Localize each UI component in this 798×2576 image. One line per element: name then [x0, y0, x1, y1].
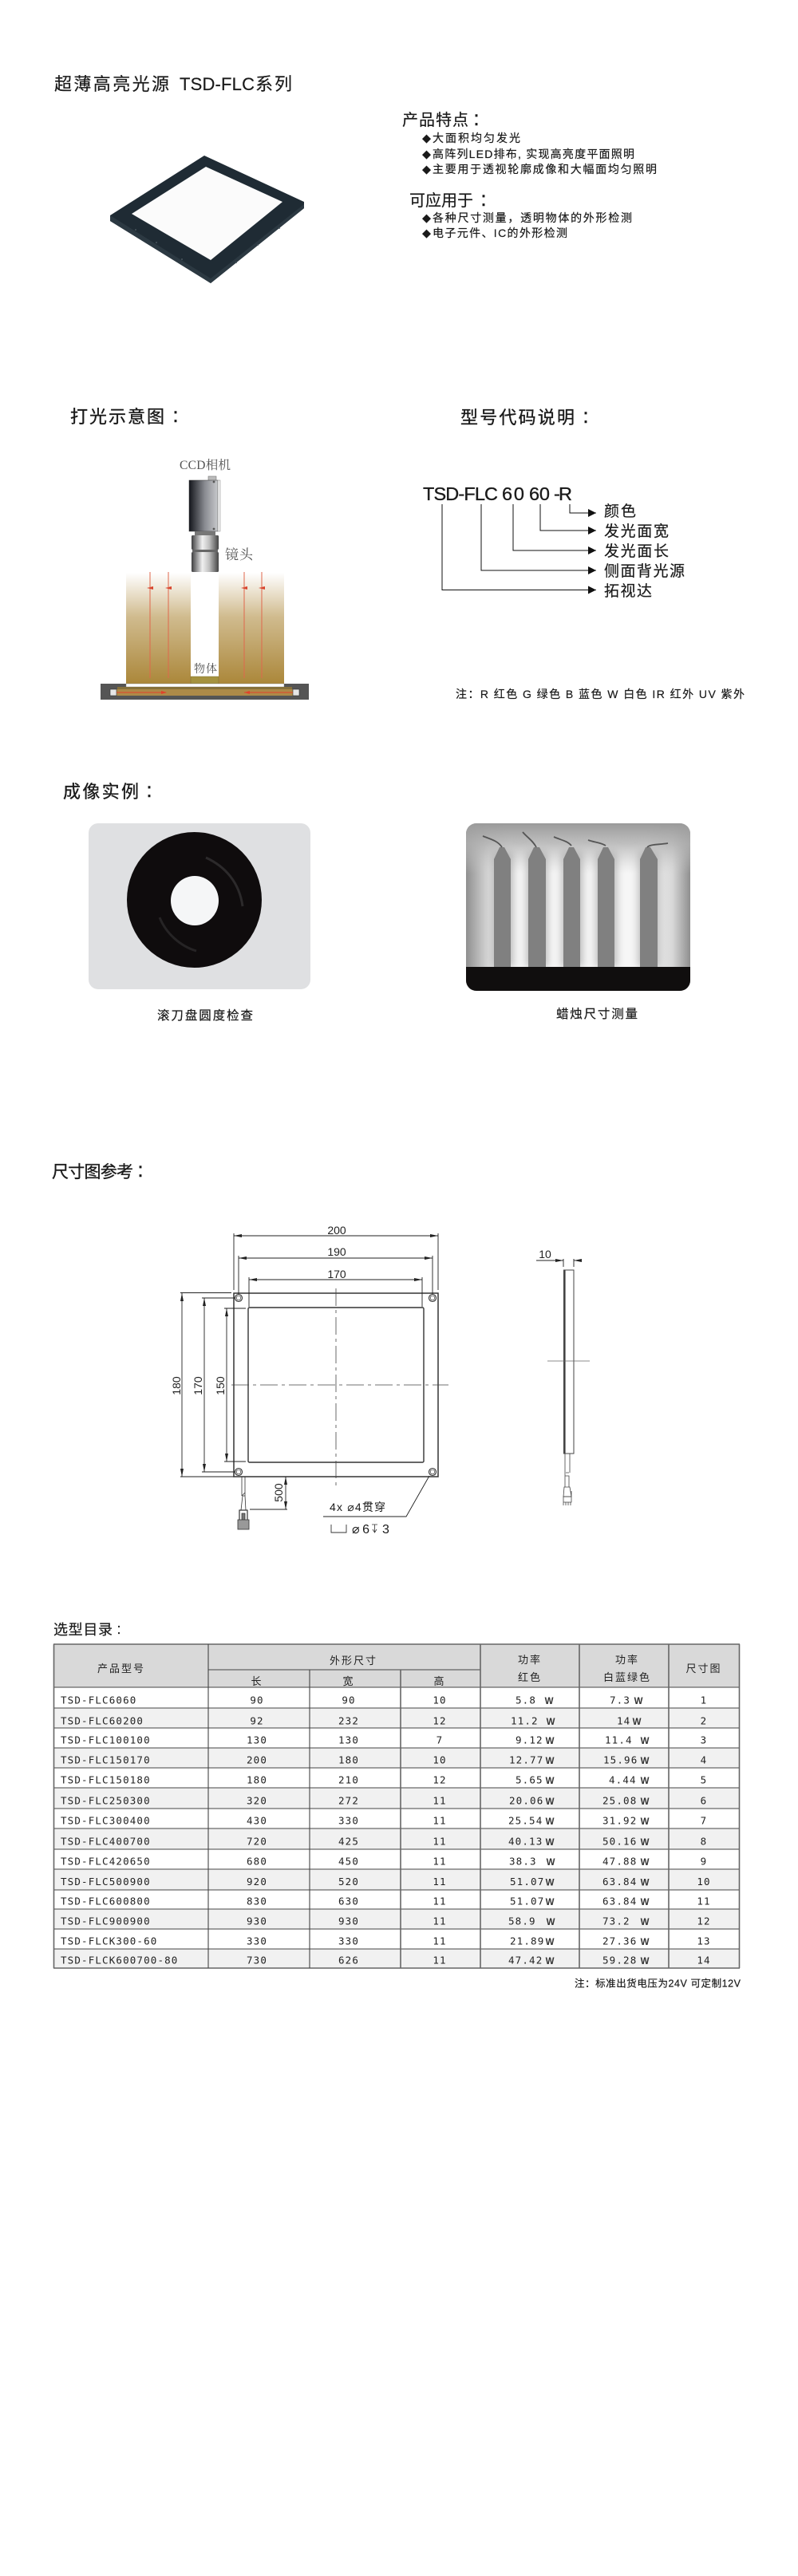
drawing number column: 3	[701, 1734, 707, 1746]
width column: 425	[338, 1835, 359, 1848]
white blue green power column: W	[641, 1918, 650, 1927]
red power column: 47.42	[508, 1955, 543, 1966]
cable and connector	[238, 1477, 249, 1529]
width dimension	[536, 1248, 580, 1267]
white blue green power column: W	[641, 1757, 650, 1766]
drawing number column: 14	[697, 1955, 711, 1966]
table header: 宽	[342, 1675, 355, 1687]
red power column: W	[546, 1777, 555, 1786]
white blue green power column: 73.2	[602, 1915, 630, 1927]
product photo: ultra-thin light panel	[110, 156, 304, 283]
model code text: 60	[529, 483, 550, 504]
applications	[409, 187, 632, 239]
hole callout: 3	[382, 1523, 389, 1537]
model code diagram	[423, 483, 685, 600]
white blue green power column: 4.44	[609, 1774, 637, 1785]
white blue green power column: 47.88	[602, 1856, 637, 1867]
table header: 产品型号	[97, 1663, 145, 1675]
white blue green power column: 63.84	[602, 1896, 637, 1907]
white blue green power column: W	[641, 1858, 650, 1868]
heading: dimension drawing: :	[137, 1158, 144, 1181]
model column: TSD-FLC150170	[61, 1753, 151, 1766]
red power column: 20.06	[509, 1795, 543, 1806]
key labels: 发光面长	[604, 542, 669, 560]
voltage note: 注：标准出货电压为24V 可定制12V	[575, 1977, 741, 1990]
colour code note: 注：R 红色 G 绿色 B 蓝色 W 白色 IR 红外 UV 紫外	[456, 688, 745, 700]
white blue green power column: 7.3	[610, 1694, 630, 1706]
caption: 滚刀盘圆度检查	[157, 1008, 253, 1023]
table header: 白蓝绿色	[603, 1671, 651, 1683]
width column: 180	[338, 1753, 359, 1766]
dimension values: 190	[327, 1245, 346, 1258]
side outline	[563, 1270, 574, 1454]
model column: TSD-FLCK300-60	[61, 1935, 157, 1947]
heading: lighting diagram: 打光示意图	[70, 407, 164, 427]
table header: 红色	[518, 1671, 542, 1683]
width column: 930	[338, 1915, 359, 1927]
length column: 930	[247, 1915, 267, 1927]
length column: 680	[247, 1856, 267, 1867]
feature list: ◆	[422, 165, 431, 176]
drawing number column: 1	[701, 1694, 707, 1706]
heading: lighting diagram: :	[172, 403, 179, 427]
model code text	[423, 483, 572, 504]
model column	[61, 1694, 179, 1966]
red power column: 51.07	[510, 1876, 544, 1888]
red power column: 11.2	[511, 1715, 539, 1726]
drawing number column: 4	[701, 1753, 707, 1766]
red power column: W	[547, 1858, 555, 1868]
white blue green power column: W	[641, 1797, 650, 1807]
model column: TSD-FLC300400	[61, 1814, 151, 1827]
key labels: 侧面背光源	[604, 562, 685, 580]
model column: TSD-FLCK600700-80	[61, 1955, 179, 1966]
heading: product features	[402, 106, 480, 130]
drawing number column: 11	[697, 1896, 711, 1907]
feature list: 主要用于透视轮廓成像和大幅面均匀照明	[433, 163, 657, 176]
application list: ◆	[422, 214, 431, 224]
heading: imaging examples: 成像实例	[63, 782, 139, 802]
drawing number column: 9	[701, 1856, 707, 1867]
application list: ◆	[422, 229, 431, 239]
red power column: 25.54	[508, 1814, 543, 1827]
white blue green power column: W	[641, 1957, 650, 1967]
length column: 130	[247, 1734, 267, 1746]
title	[54, 74, 292, 94]
drawing number column: 7	[701, 1814, 707, 1827]
white blue green power column: 11.4	[605, 1734, 633, 1746]
table grid	[53, 1644, 740, 1968]
object	[191, 677, 219, 684]
model code text: TSD-FLC	[423, 483, 498, 504]
white blue green power column: W	[641, 1737, 650, 1746]
red power column: W	[546, 1838, 555, 1848]
white blue green power column: W	[634, 1697, 643, 1706]
height column: 7	[437, 1734, 443, 1746]
width column: 210	[338, 1774, 359, 1785]
title: 系列	[255, 74, 292, 94]
height column: 11	[433, 1935, 447, 1947]
key labels: 颜色	[604, 503, 636, 520]
height column: 11	[433, 1915, 447, 1927]
table header: 外形尺寸	[330, 1655, 377, 1667]
object label: 物体	[194, 662, 217, 676]
model column: TSD-FLC420650	[61, 1856, 151, 1867]
heading: imaging examples: :	[146, 778, 152, 802]
white blue green power column: 25.08	[602, 1795, 637, 1806]
dimension values: 500	[272, 1483, 285, 1502]
hole callout: ⌀6	[352, 1523, 369, 1537]
drawing number column: 12	[697, 1915, 711, 1927]
height column: 12	[433, 1715, 447, 1726]
red power column: 21.89	[510, 1935, 544, 1947]
centre line	[547, 1360, 590, 1362]
cable and connector	[563, 1454, 571, 1505]
backlight housing	[101, 684, 309, 700]
key labels	[604, 503, 685, 600]
length column: 320	[247, 1795, 267, 1806]
heading: model code: :	[583, 404, 589, 428]
table header: 功率	[518, 1654, 542, 1666]
dimension values: 180	[170, 1376, 183, 1395]
white blue green power column: 27.36	[602, 1935, 637, 1947]
heading: dimension drawing	[52, 1158, 144, 1181]
white blue green power column: W	[641, 1817, 650, 1827]
length column: 920	[247, 1876, 267, 1888]
model column: TSD-FLC6060	[61, 1694, 136, 1706]
width column: 626	[338, 1955, 359, 1966]
height column: 10	[433, 1753, 447, 1766]
width column: 330	[338, 1814, 359, 1827]
heading: applications: 可应用于	[409, 191, 473, 210]
panel outline	[234, 1293, 438, 1477]
dimension drawing: side view	[536, 1248, 590, 1505]
drawing number column: 2	[701, 1715, 707, 1726]
key labels: 拓视达	[604, 582, 652, 600]
table header: 高	[433, 1675, 446, 1687]
heading: product features: 产品特点	[402, 111, 468, 129]
width dimension: 10	[539, 1248, 551, 1260]
white blue green power column: 63.84	[602, 1876, 637, 1888]
white blue green power column: 15.96	[603, 1753, 638, 1766]
red power column: W	[545, 1697, 554, 1706]
drawing number column: 5	[701, 1774, 707, 1785]
dimension drawing: front view	[170, 1224, 448, 1537]
width column	[338, 1694, 359, 1966]
length column: 830	[247, 1896, 267, 1907]
red power column: W	[546, 1878, 555, 1888]
title: TSD-FLC	[180, 74, 255, 94]
white blue green power column	[602, 1694, 650, 1967]
red power column: W	[546, 1737, 555, 1746]
drawing number column: 13	[697, 1935, 711, 1947]
drawing number column: 6	[701, 1795, 707, 1806]
width column: 630	[338, 1896, 359, 1907]
white blue green power column: 31.92	[602, 1814, 637, 1827]
dimension lines	[180, 1233, 438, 1517]
model code text: 60	[502, 483, 524, 504]
icon: CCD camera	[189, 476, 220, 531]
red power column: W	[546, 1817, 555, 1827]
red power column: W	[547, 1918, 555, 1927]
heading: dimension drawing: 尺寸图参考	[52, 1163, 133, 1181]
red power column: 58.9	[508, 1915, 536, 1927]
red light rays	[150, 572, 262, 678]
heading: model code: 型号代码说明	[460, 408, 575, 428]
light beams	[126, 573, 284, 684]
red power column: W	[547, 1718, 555, 1727]
dimension values: 170	[327, 1268, 346, 1280]
model column: TSD-FLC500900	[61, 1876, 151, 1888]
drawing number column	[697, 1694, 711, 1966]
height column: 11	[433, 1814, 447, 1827]
dimension values	[170, 1224, 346, 1502]
table header	[53, 1644, 740, 1687]
key labels: 发光面宽	[604, 523, 669, 540]
height column: 11	[433, 1835, 447, 1848]
red power column: 12.77	[509, 1753, 543, 1766]
height column: 10	[433, 1694, 447, 1706]
dimension values: 150	[214, 1376, 227, 1395]
red power column: 5.8	[516, 1694, 536, 1706]
application list: 各种尺寸测量，透明物体的外形检测	[433, 211, 632, 224]
white blue green power column: W	[633, 1718, 642, 1727]
red power column: 5.65	[516, 1774, 543, 1785]
red power column	[508, 1694, 555, 1967]
photo: hob disc silhouette	[89, 823, 310, 989]
height column: 11	[433, 1876, 447, 1888]
camera label: CCD相机	[180, 458, 231, 472]
heading: selection catalogue: 选型目录	[53, 1622, 113, 1638]
white blue green power column: W	[641, 1838, 650, 1848]
dimension values: 170	[192, 1376, 204, 1395]
title: 超薄高亮光源	[54, 74, 169, 94]
example: hob disc	[89, 823, 310, 1023]
icon: lens	[192, 531, 219, 572]
application list	[422, 211, 632, 239]
example: candles	[466, 823, 690, 1021]
white blue green power column: W	[641, 1938, 650, 1947]
width column: 330	[338, 1935, 359, 1947]
width column: 90	[342, 1694, 356, 1706]
lens label: 镜头	[225, 546, 254, 562]
white blue green power column: W	[641, 1777, 650, 1786]
red power column: 9.12	[516, 1734, 543, 1746]
length column: 330	[247, 1935, 267, 1947]
height column: 11	[433, 1955, 447, 1966]
length column: 730	[247, 1955, 267, 1966]
height column: 11	[433, 1896, 447, 1907]
height column: 11	[433, 1856, 447, 1867]
height column: 11	[433, 1795, 447, 1806]
model column: TSD-FLC150180	[61, 1774, 151, 1785]
heading: product features: :	[473, 106, 480, 130]
white blue green power column: 14	[617, 1715, 630, 1726]
heading: selection catalogue: :	[117, 1621, 121, 1637]
model column: TSD-FLC400700	[61, 1835, 151, 1848]
model column: TSD-FLC600800	[61, 1896, 151, 1907]
lighting diagram	[101, 458, 309, 700]
application list: 电子元件、IC的外形检测	[433, 227, 567, 239]
key lines	[442, 504, 596, 590]
model column: TSD-FLC250300	[61, 1795, 151, 1806]
model column: TSD-FLC100100	[61, 1734, 151, 1746]
hole callout: 4x ⌀4贯穿	[330, 1501, 385, 1513]
dimension values: 200	[327, 1224, 346, 1237]
red power column: 40.13	[508, 1835, 543, 1848]
caption: 蜡烛尺寸测量	[556, 1007, 638, 1021]
length column: 92	[250, 1715, 264, 1726]
width column: 130	[338, 1734, 359, 1746]
table header: 尺寸图	[685, 1663, 722, 1675]
width column: 520	[338, 1876, 359, 1888]
length column	[247, 1694, 267, 1966]
white blue green power column: 59.28	[602, 1955, 637, 1966]
row shading	[53, 1708, 740, 1968]
width column: 232	[338, 1715, 359, 1726]
length column: 430	[247, 1814, 267, 1827]
width column: 450	[338, 1856, 359, 1867]
feature list: ◆	[422, 150, 431, 160]
heading: applications: :	[480, 187, 487, 211]
length column: 180	[247, 1774, 267, 1785]
red power column: W	[546, 1757, 555, 1766]
feature list: ◆	[422, 134, 431, 144]
centre lines	[231, 1288, 448, 1488]
selection table	[53, 1644, 740, 1968]
photo: candle silhouettes	[466, 823, 690, 991]
white blue green power column: 50.16	[602, 1835, 637, 1848]
product features	[402, 106, 657, 176]
model code text: -R	[554, 483, 572, 504]
drawing number column: 8	[701, 1835, 707, 1848]
width column: 272	[338, 1795, 359, 1806]
red power column: W	[546, 1797, 555, 1807]
height column: 12	[433, 1774, 447, 1785]
table header: 长	[251, 1675, 263, 1687]
length column: 720	[247, 1835, 267, 1848]
red power column: 51.07	[510, 1896, 544, 1907]
model column: TSD-FLC60200	[61, 1715, 144, 1726]
height column	[433, 1694, 447, 1966]
feature list: 大面积均匀发光	[433, 132, 520, 144]
red power column: W	[546, 1957, 555, 1967]
heading: applications	[409, 187, 487, 211]
white blue green power column: W	[641, 1878, 650, 1888]
red power column: W	[546, 1938, 555, 1947]
red power column: W	[546, 1898, 555, 1907]
feature list	[422, 132, 657, 176]
white blue green power column: W	[641, 1898, 650, 1907]
red power column: 38.3	[509, 1856, 537, 1867]
hole callout	[330, 1501, 389, 1537]
drawing number column: 10	[697, 1876, 711, 1888]
model column: TSD-FLC900900	[61, 1915, 151, 1927]
table header: 功率	[615, 1654, 639, 1666]
length column: 90	[250, 1694, 264, 1706]
feature list: 高阵列LED排布, 实现高亮度平面照明	[433, 148, 634, 160]
length column: 200	[247, 1753, 267, 1766]
